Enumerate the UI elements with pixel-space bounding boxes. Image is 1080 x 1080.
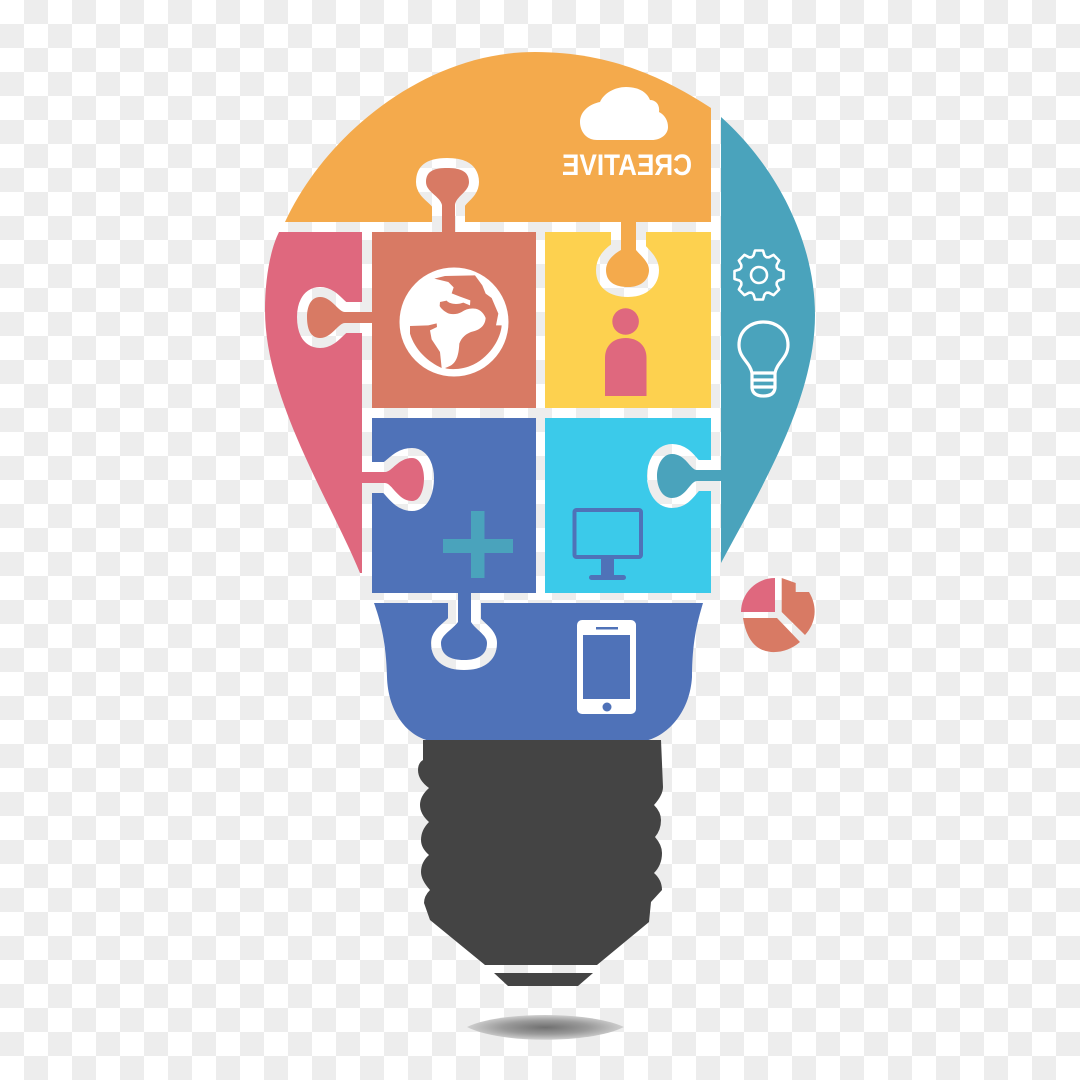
panel: cyan square [545, 418, 711, 593]
panel: teal right piece [721, 117, 815, 563]
icon: smartphone [577, 620, 636, 714]
puzzle tab: rust into orange [426, 168, 469, 240]
bulb base tip [494, 973, 593, 986]
icon: globe [400, 268, 508, 376]
chart: pie icon [741, 578, 815, 652]
panel: blue square [372, 418, 536, 593]
panel: rust square [372, 232, 536, 408]
icon: gear [734, 250, 784, 300]
puzzle tab: blue into neck [441, 585, 487, 660]
puzzle tab: orange into yellow [606, 215, 649, 287]
icon: cloud [580, 87, 668, 140]
text: mirrored CREATIVE label: CREATIVE [562, 149, 692, 182]
puzzle tab: pink into blue [355, 458, 424, 501]
panel: orange top piece [285, 52, 711, 222]
bulb screw base [418, 740, 663, 965]
puzzle tab: teal into cyan [657, 454, 730, 498]
panel: yellow square [545, 232, 711, 408]
ground shadow [467, 1015, 624, 1040]
icon: small light bulb [739, 322, 788, 396]
icon: person [605, 308, 646, 396]
icon: monitor [574, 510, 641, 580]
panel: blue bulb neck [374, 603, 703, 741]
puzzle tab: rust into pink [307, 297, 380, 338]
icon: plus [443, 511, 513, 578]
panel: pink left piece [265, 232, 362, 573]
